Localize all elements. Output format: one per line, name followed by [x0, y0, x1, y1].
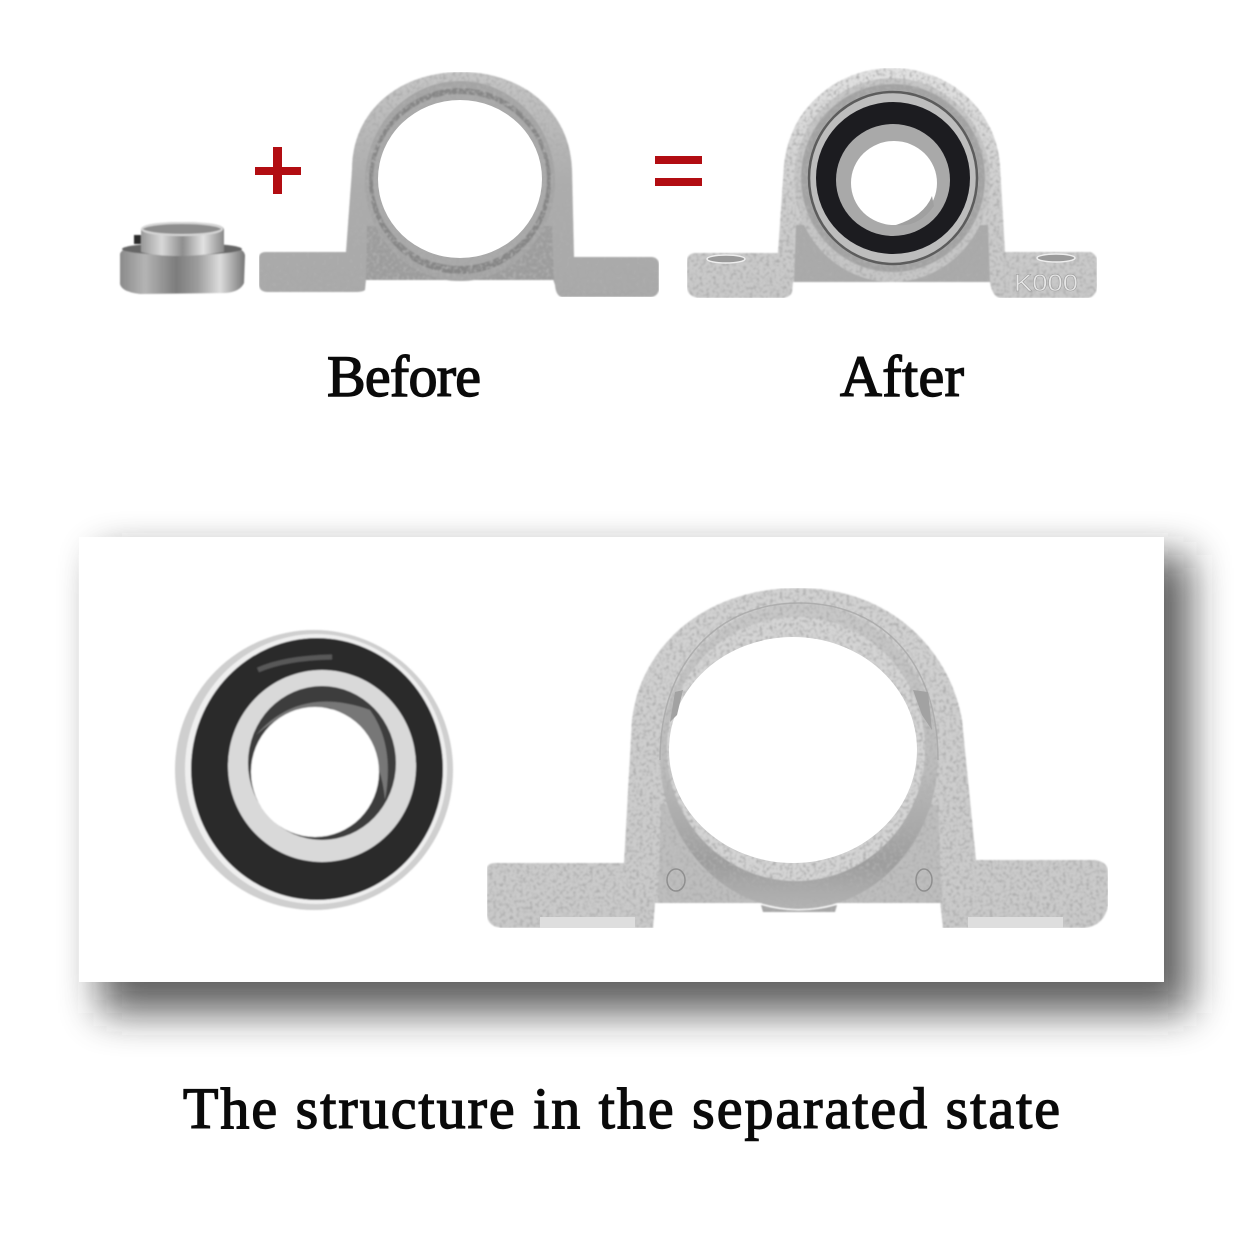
mounting holes [707, 254, 1075, 263]
inner race [228, 670, 416, 862]
dark bore wall [248, 686, 396, 840]
web bolt marks [667, 869, 932, 891]
bore inner highlight [896, 196, 934, 225]
photo: assembled pillow block bearing [687, 68, 1097, 298]
bearing bore [851, 141, 937, 225]
bearing inner race [836, 124, 950, 236]
caption: The structure in the separated state [183, 1076, 1060, 1141]
panel surface [79, 537, 1164, 982]
assembled housing body [687, 68, 1097, 298]
photo: housing front view [487, 588, 1108, 928]
bore opening [251, 707, 379, 837]
label: Before: Before [327, 344, 481, 409]
bore notches [670, 690, 932, 730]
rim contour [660, 603, 938, 760]
photo: empty pillow block housing [259, 72, 659, 297]
label: After: After [840, 344, 964, 409]
foot recess marks [540, 917, 1063, 928]
seal lettering [258, 657, 332, 670]
housing bore opening [669, 637, 917, 863]
foot marking: K000 [1014, 270, 1078, 297]
photo: insert bearing side view [120, 222, 245, 294]
panel: separated parts [79, 537, 1190, 1013]
housing bore opening [378, 100, 542, 258]
outer race [175, 630, 453, 910]
plus sign [255, 147, 301, 194]
photo: bearing front view [175, 630, 453, 910]
bearing outer race [809, 92, 977, 264]
black seal [191, 638, 443, 900]
panel drop shadow [100, 555, 1190, 1013]
black rubber seal [816, 102, 970, 254]
equals sign [655, 156, 702, 186]
